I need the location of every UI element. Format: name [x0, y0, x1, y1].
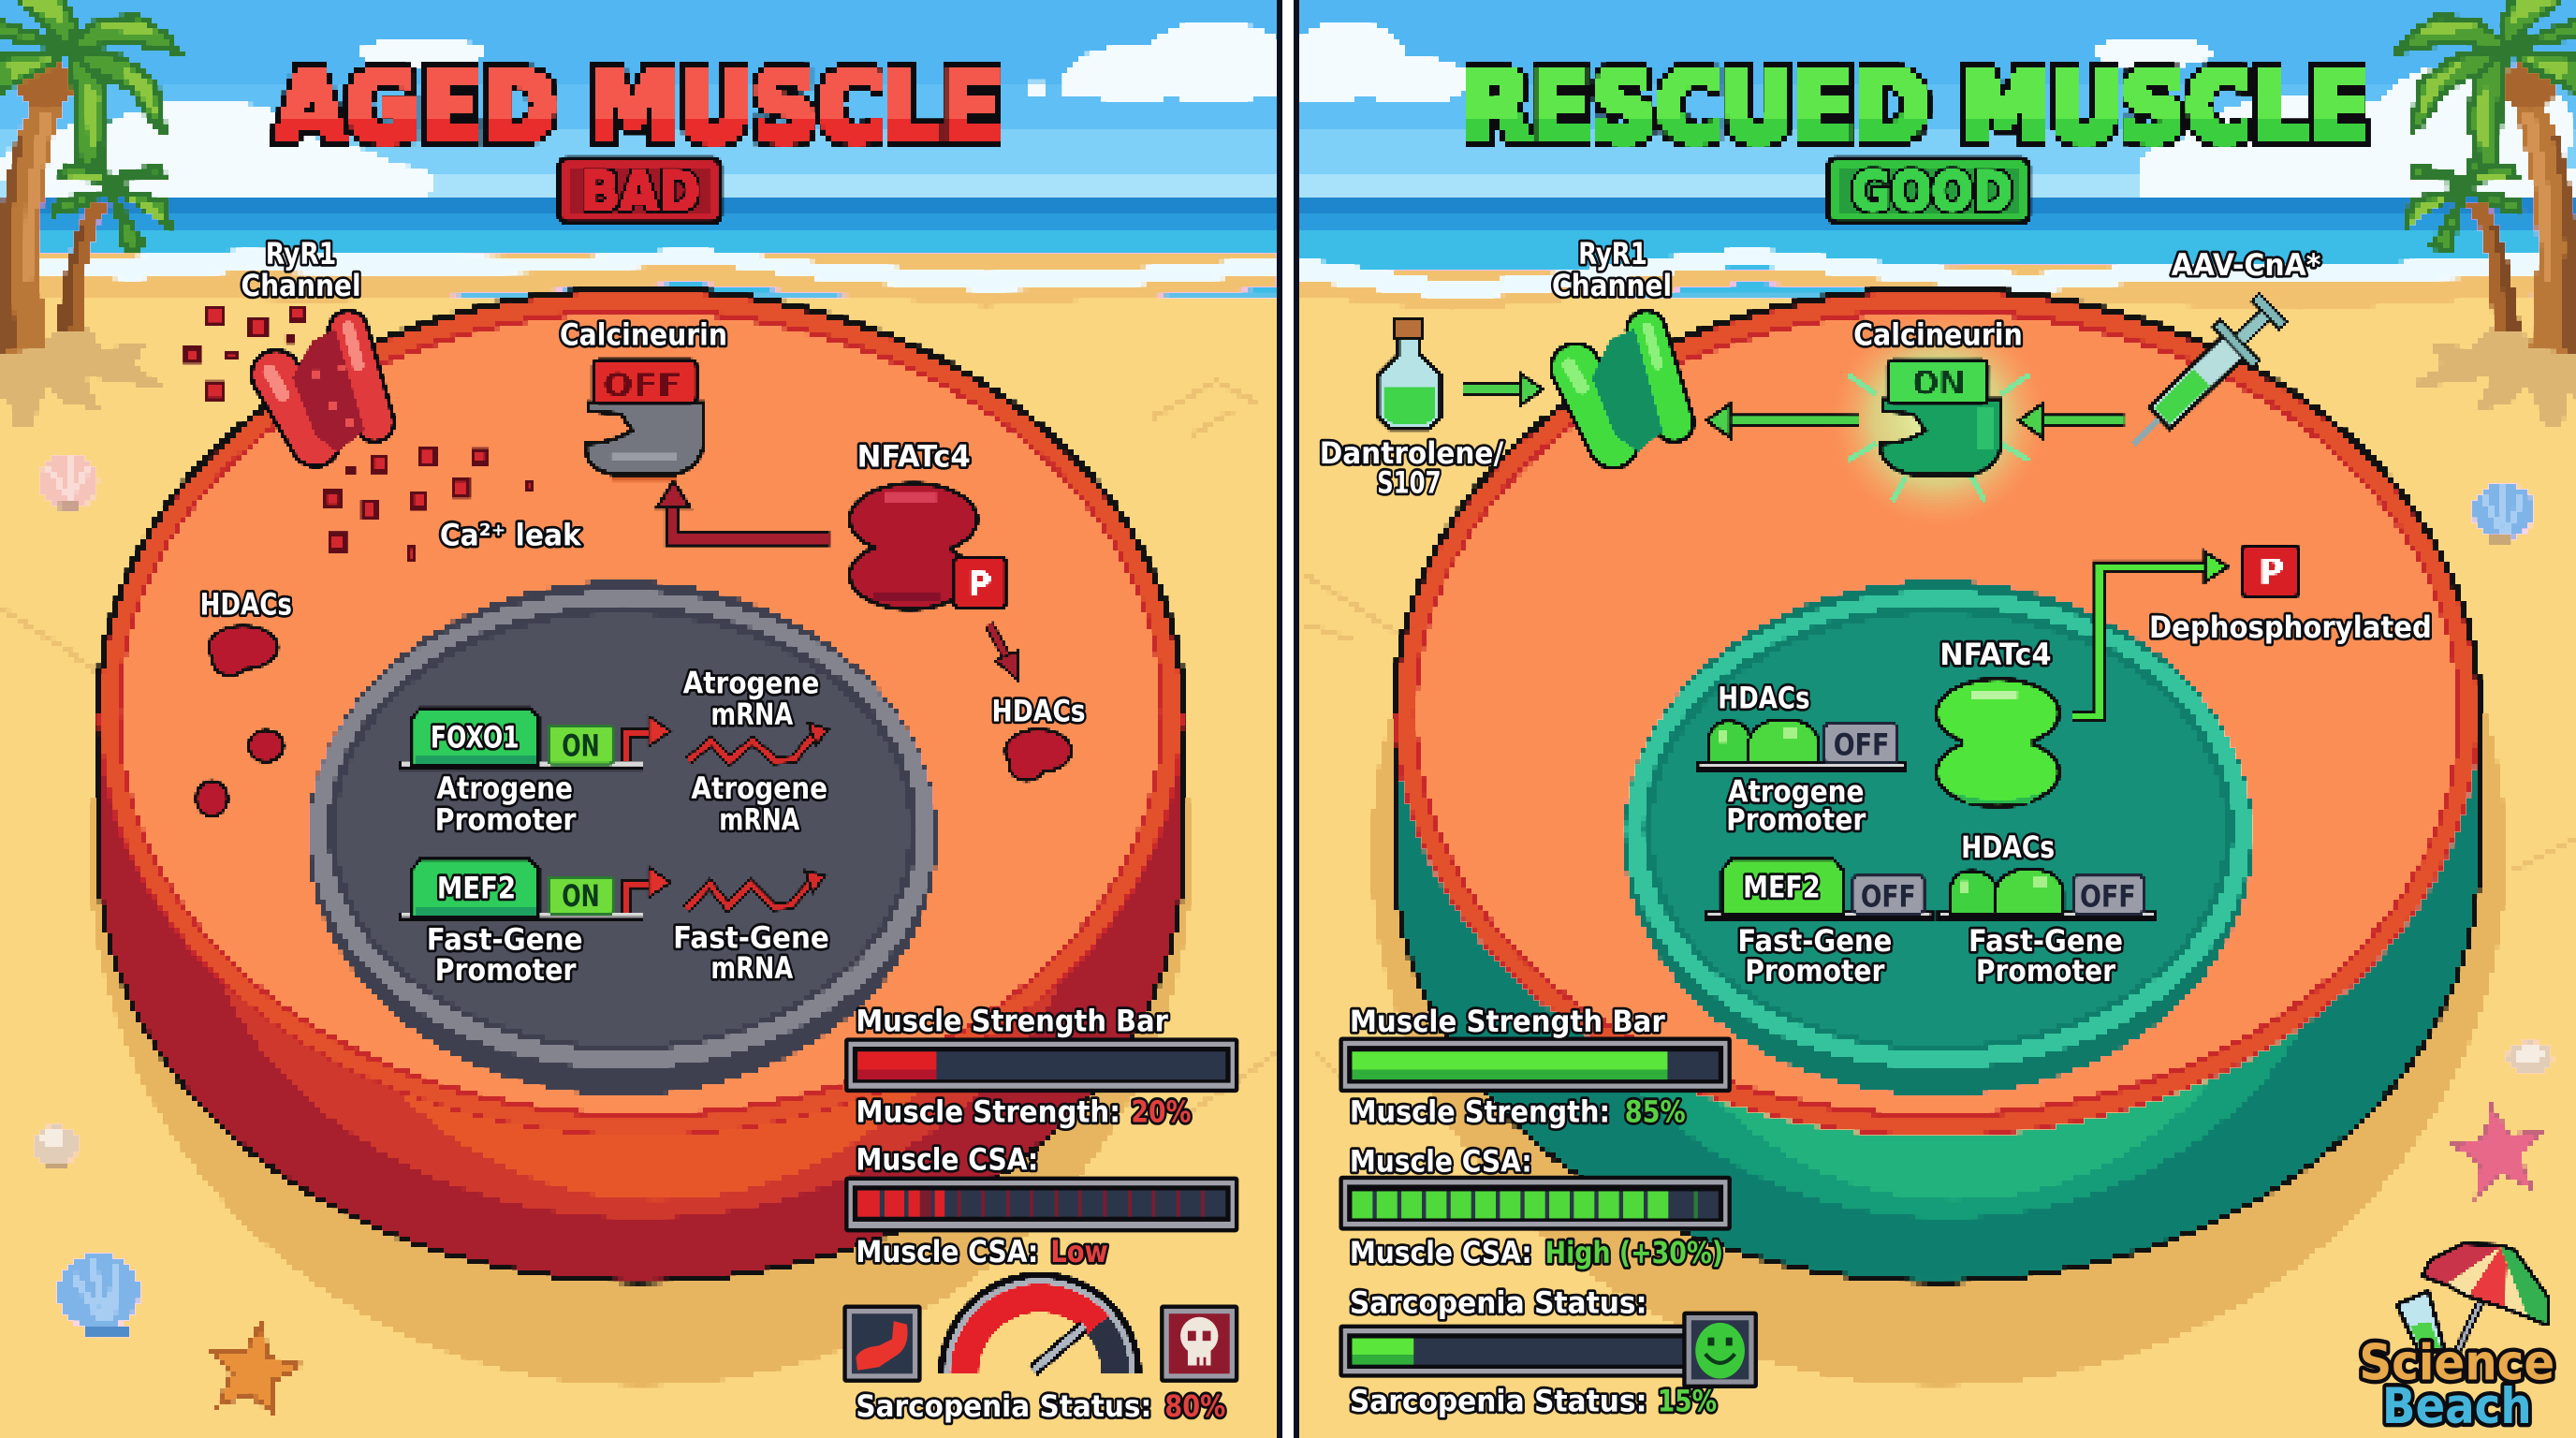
- label: atrogene promoter: [435, 772, 577, 837]
- cell top membrane: [98, 289, 1183, 1137]
- label: calcineurin: Calcineurin: [560, 319, 727, 353]
- gene: FOXO1 on: [399, 708, 670, 770]
- icon tile: muscle: [842, 1305, 922, 1383]
- label: fast-gene mRNA: [673, 922, 829, 986]
- gauge: sarcopenia: [948, 1282, 1132, 1373]
- bar: muscle strength rescued: [1339, 1036, 1732, 1093]
- panel: aged muscle: [91, 51, 1238, 1424]
- arrow: syringe to calcineurin: [2019, 404, 2124, 437]
- label: fast-gene promoter left: [1737, 925, 1892, 989]
- label: NFATc4: NFATc4: [857, 440, 971, 474]
- label: muscle strength 85%: Muscle Strength:: [1350, 1096, 1610, 1130]
- label: OFF atrogene: OFF: [1834, 729, 1889, 763]
- label: OFF MEF2: OFF: [1861, 880, 1916, 914]
- label: HDACs atrogene: HDACs: [1718, 682, 1810, 715]
- label: fast-gene promoter right: [1969, 925, 2123, 989]
- label: muscle strength 85%: 85%: [1625, 1096, 1686, 1130]
- bar: muscle CSA aged: [844, 1177, 1238, 1232]
- nucleus: teal: [1623, 580, 2254, 1096]
- icon: phosphate tag: [2241, 544, 2300, 599]
- arrow: bottle to RyR1: [1462, 374, 1543, 404]
- label: RyR1 channel: Channel: [241, 270, 361, 303]
- arrow: NFAT dephosphorylation elbow: [2073, 552, 2228, 716]
- label: RyR1 channel: Channel: [1552, 270, 1672, 303]
- label: fast-gene mRNA: mRNA: [710, 952, 794, 986]
- label: calcineurin: Calcineurin: [1853, 319, 2023, 353]
- icon: repaired RyR1 channel: [1569, 327, 1674, 452]
- icon: active NFATc4: [1935, 677, 2061, 809]
- label: AAV-CnA: AAV-CnA*: [2172, 249, 2320, 283]
- label: fast-gene promoter: Fast-Gene: [427, 923, 583, 957]
- palm trees left: [0, 0, 181, 427]
- icon: calcineurin off: OFF: [603, 366, 681, 404]
- arrow: nfat to hdacs: [989, 624, 1018, 681]
- icon: calcineurin off: [587, 359, 703, 481]
- arrow: calcineurin to RyR1: [1707, 404, 1858, 437]
- label: fast-gene mRNA: Fast-Gene: [673, 922, 829, 956]
- badge: bad: BAD: [581, 160, 700, 224]
- bar: muscle strength aged: [844, 1037, 1238, 1093]
- label: muscle strength 20%: Muscle Strength:: [856, 1096, 1120, 1130]
- title: rescued muscle: RESCUED MUSCLE: [1462, 51, 2369, 164]
- label: sarcopenia status: Sarcopenia Status:: [1350, 1286, 1647, 1320]
- label: sarcopenia status 15%: 15%: [1658, 1386, 1717, 1419]
- label: muscle CSA high: Muscle CSA:: [1350, 1237, 1532, 1270]
- label: fast-gene promoter left: Promoter: [1745, 955, 1885, 989]
- label: ON MEF2: ON: [562, 880, 600, 914]
- label: muscle CSA low: Low: [1050, 1236, 1108, 1269]
- arrow: nfat to calcineurin: [657, 481, 829, 539]
- label: atrogene promoter: [1726, 775, 1866, 837]
- gene: MEF2 on: [399, 859, 670, 922]
- cell top membrane: [1395, 289, 2479, 1137]
- icon: broken RyR1 channel: [270, 327, 374, 452]
- icon: calcineurin on: ON: [1912, 364, 1965, 403]
- squiggle: atrogene mRNA: [688, 723, 828, 761]
- label: muscle CSA: Muscle CSA:: [856, 1144, 1038, 1178]
- icons: cytoplasmic HDACs: [195, 624, 1073, 817]
- badge: good: GOOD: [1852, 160, 2012, 224]
- title: aged muscle: AGED MUSCLE: [275, 51, 1003, 164]
- label: fast-gene promoter: [427, 923, 583, 988]
- label: sarcopenia status 80%: 80%: [1164, 1390, 1225, 1424]
- label: dantrolene S107: [1320, 437, 1504, 501]
- icon: phosphorylated NFATc4: P: [968, 565, 991, 603]
- bar: muscle CSA rescued: [1339, 1176, 1732, 1231]
- icon: AAV syringe: [2115, 288, 2292, 463]
- label: atrogene mRNA: [691, 772, 827, 837]
- logo text: science beach: Science: [2359, 1334, 2554, 1391]
- label: sarcopenia status 15%: Sarcopenia Status:: [1350, 1386, 1647, 1419]
- label: atrogene mRNA top: [683, 668, 819, 732]
- label: RyR1 channel: [241, 238, 361, 303]
- label: MEF2: MEF2: [1743, 871, 1821, 904]
- label: ON FOXO1: ON: [562, 729, 600, 763]
- label: atrogene promoter: Promoter: [435, 803, 577, 837]
- label: muscle CSA high: [1350, 1237, 1723, 1270]
- squiggle: fast-gene mRNA: [687, 871, 825, 909]
- label: dantrolene S107: S107: [1377, 467, 1442, 501]
- logo text: science beach: [2359, 1334, 2554, 1435]
- glow: calcineurin active: [1830, 311, 2047, 527]
- label: muscle CSA high: High (+30%): [1545, 1237, 1723, 1270]
- label: dantrolene S107: Dantrolene/: [1320, 437, 1504, 471]
- cell shadow on sand: [91, 324, 1191, 1386]
- palm trees right: [2395, 0, 2576, 427]
- label: calcium leak: Ca²⁺ leak: [440, 520, 582, 553]
- label: atrogene promoter: Atrogene: [1728, 775, 1865, 809]
- label: fast-gene promoter left: Fast-Gene: [1737, 925, 1892, 959]
- bar: sarcopenia rescued: [1339, 1325, 1690, 1378]
- label: HDACs right: HDACs: [992, 695, 1086, 728]
- cell shadow on sand: [1372, 324, 2506, 1386]
- label: muscle CSA: Muscle CSA:: [1350, 1145, 1532, 1179]
- label: RyR1 channel: RyR1: [266, 238, 336, 271]
- label: atrogene mRNA top: mRNA: [710, 698, 794, 732]
- label: fast-gene promoter right: Fast-Gene: [1969, 925, 2123, 959]
- icon: phosphate tag: P: [2259, 551, 2284, 592]
- label: HDACs left: HDACs: [200, 588, 292, 622]
- label: RyR1 channel: [1552, 238, 1672, 303]
- label: NFATc4: NFATc4: [1939, 638, 2052, 672]
- icon: phosphorylated NFATc4: [848, 481, 1007, 611]
- label: muscle strength 20%: 20%: [1131, 1096, 1191, 1130]
- label: atrogene mRNA top: Atrogene: [683, 668, 819, 701]
- label: OFF fast-gene: OFF: [2080, 880, 2136, 914]
- label: atrogene promoter: Promoter: [1726, 803, 1866, 837]
- gene: HDACs on atrogene promoter off: [1697, 720, 1907, 772]
- label: FOXO1: FOXO1: [431, 722, 520, 756]
- gene: MEF2 off: [1705, 859, 1934, 922]
- gene: HDACs on fast-gene promoter off: [1937, 869, 2157, 922]
- label: fast-gene promoter: Promoter: [435, 954, 577, 988]
- shell: beige right: [2507, 1042, 2553, 1075]
- label: muscle strength bar: Muscle Strength Bar: [1350, 1005, 1665, 1039]
- panel: rescued muscle: [1320, 51, 2554, 1435]
- label: atrogene mRNA: Atrogene: [691, 772, 827, 806]
- shell: beige: [33, 1125, 79, 1167]
- label: fast-gene promoter right: Promoter: [1976, 955, 2115, 989]
- shell: blue: [57, 1254, 139, 1338]
- shell: blue right: [2472, 483, 2535, 544]
- label: RyR1 channel: RyR1: [1578, 238, 1647, 271]
- starfish: orange: [200, 1315, 308, 1419]
- label: HDACs fast-gene: HDACs: [1961, 831, 2055, 865]
- label: dephosphorylated: Dephosphorylated: [2149, 611, 2432, 645]
- calcium particles: [185, 307, 533, 560]
- icon tile: smiley: [1682, 1312, 1758, 1388]
- label: atrogene promoter: Atrogene: [436, 772, 573, 806]
- logo text: science beach: Beach: [2382, 1378, 2532, 1435]
- cell cylinder side: [1395, 498, 2479, 1282]
- shell: pink: [39, 453, 98, 509]
- icon: dantrolene bottle: [1379, 318, 1441, 429]
- label: muscle CSA low: Muscle CSA:: [856, 1236, 1038, 1269]
- cell cylinder side: [98, 498, 1183, 1282]
- label: sarcopenia status 80%: Sarcopenia Status:: [856, 1390, 1151, 1424]
- nucleus: grey: [307, 580, 938, 1096]
- label: MEF2: MEF2: [437, 873, 516, 906]
- label: muscle strength bar: Muscle Strength Bar: [856, 1005, 1168, 1039]
- divider between panels: [1277, 0, 1299, 1438]
- starfish: pink: [2446, 1098, 2551, 1199]
- icon tile: skull: [1160, 1305, 1238, 1383]
- icon: calcineurin on: [1881, 359, 2001, 475]
- logo: science beach: [2397, 1245, 2546, 1351]
- label: atrogene mRNA: mRNA: [719, 803, 800, 837]
